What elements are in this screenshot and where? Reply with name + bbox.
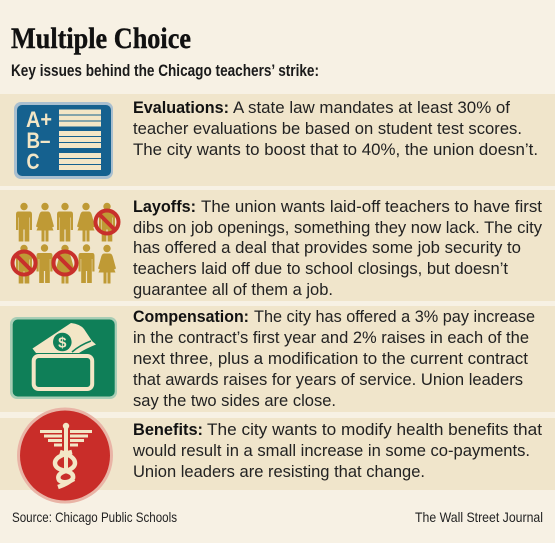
icon: report card: B– [26, 128, 50, 153]
benefits text: would result in a small increase in some co-payments. [132, 441, 530, 460]
layoffs text: guarantee all of them a job. [133, 280, 333, 299]
compensation text: that awards raises for years of service. Union leaders [133, 370, 523, 389]
panel: layoffs [0, 190, 555, 301]
icon: people with prohibition signs [12, 203, 118, 284]
evaluations text [133, 98, 538, 159]
icon: wallet with cash: $ [58, 334, 67, 352]
layoffs text: dibs on job openings, something they now lack. The city [133, 218, 542, 237]
panel: compensation [0, 306, 555, 412]
icon: caduceus medical symbol [17, 408, 113, 504]
benefits text [132, 420, 542, 481]
title: Multiple Choice [11, 22, 191, 55]
compensation text: next three, plus a modification to the current contract [133, 349, 528, 368]
panel: evaluations [0, 94, 555, 186]
evaluations text: A state law mandates at least 30% of [233, 98, 510, 117]
benefits text: Union leaders are resisting that change. [133, 462, 425, 481]
icon: wallet with cash [10, 317, 117, 399]
evaluations text: The city wants to boost that to 40%, the union doesn’t. [133, 140, 538, 159]
subtitle: Key issues behind the Chicago teachers’ strike: [11, 62, 319, 80]
icon: report card: C [26, 149, 40, 174]
layoffs text: Layoffs: [133, 197, 196, 216]
layoffs text: teachers laid off due to school closings, but doesn’t [133, 259, 508, 278]
benefits text: Benefits: [133, 420, 203, 439]
layoffs text: The union wants laid-off teachers to have first [201, 197, 542, 216]
evaluations text: teacher evaluations be based on student test scores. [133, 119, 522, 138]
panel: benefits [0, 408, 555, 504]
compensation text: in the contract’s first year and 2% raises in each of the [133, 328, 529, 347]
compensation text: The city has offered a 3% pay increase [254, 307, 535, 326]
compensation text: Compensation: [133, 307, 249, 326]
evaluations text: Evaluations: [133, 98, 229, 117]
icon: report card: A+ [26, 107, 52, 132]
compensation text [133, 307, 535, 410]
icon: report card [14, 102, 113, 179]
layoffs text [133, 197, 542, 299]
layoffs text: has offered a deal that provides some job security to [133, 238, 521, 257]
compensation text: say the two sides are close. [133, 391, 336, 410]
source: Source: Chicago Public Schools [12, 509, 177, 525]
benefits text: The city wants to modify health benefits that [207, 420, 542, 439]
